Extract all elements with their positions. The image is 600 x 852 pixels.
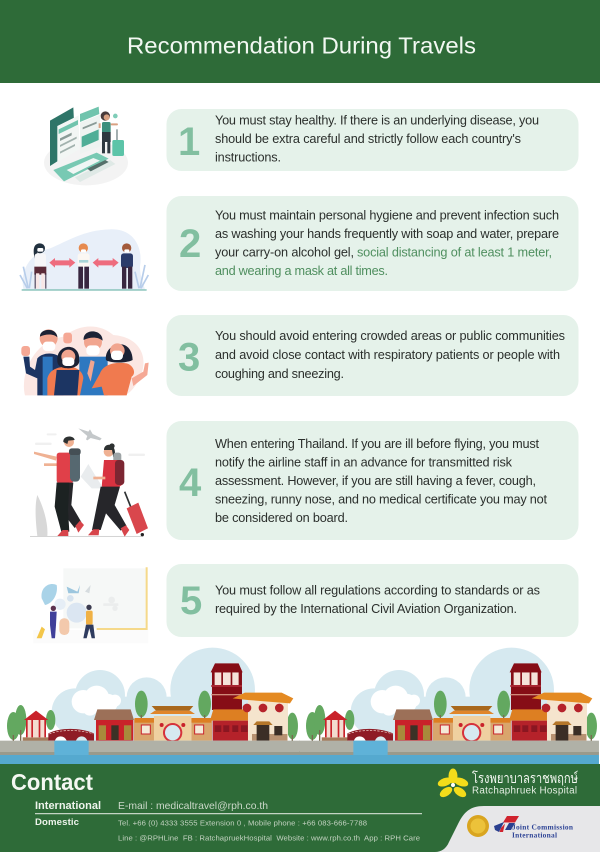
icon: flower	[437, 768, 469, 799]
domestic contact: Tel. +66 (0) 4333 3555 Extension 0 , Mobile phone : +66 083-666-7788	[118, 818, 367, 828]
panel 2 text	[215, 208, 559, 278]
illustration: social distancing seats	[20, 229, 148, 291]
illustration: aviation regulations	[33, 567, 148, 643]
illustration: traveller with phone and tickets	[44, 107, 128, 185]
number 2: 2	[179, 222, 201, 266]
international contact: E-mail : medicaltravel@rph.co.th	[118, 801, 268, 812]
number 1: 1	[178, 120, 200, 164]
number 5: 5	[180, 579, 202, 623]
panel 1 text: instructions.	[215, 150, 281, 164]
person right	[122, 243, 131, 253]
person middle	[79, 243, 88, 253]
accreditation panel	[435, 806, 600, 852]
panel 5	[166, 564, 578, 637]
suitcase	[125, 492, 131, 507]
panel 4 text: When entering Thailand. If you are ill before flying, you must	[215, 437, 539, 451]
panel 2 text: and wearing a mask at all times.	[215, 264, 388, 278]
number 3: 3	[178, 336, 200, 380]
panel 5 text	[215, 584, 540, 616]
tower	[212, 672, 242, 710]
white house	[248, 699, 288, 741]
waterfront	[0, 741, 300, 752]
red house	[94, 709, 134, 720]
panel 4 text: sneezing, runny nose, and no medical certificate you may not	[215, 492, 547, 506]
panel 1 text: You must stay healthy. If there is an underlying disease, you	[215, 114, 539, 128]
contact footer	[0, 764, 600, 852]
woman	[104, 447, 114, 457]
right woman	[92, 363, 134, 395]
number 4: 4	[179, 461, 202, 505]
international contact: International	[35, 800, 101, 812]
panel 1 text	[215, 114, 539, 164]
domestic contact: Line : @RPHLine FB : RatchapruekHospital Website : www.rph.co.th App : RPH Care	[118, 834, 420, 842]
bridge	[48, 729, 94, 741]
panel 1 text: should be extra careful and strictly follow each country's	[215, 132, 521, 146]
joint commission logo	[494, 816, 573, 840]
front woman	[47, 367, 83, 395]
panel 4 text	[215, 437, 547, 525]
panel 4 text: notify the airline staff in an advance for transmitted risk	[215, 456, 513, 470]
panel 4	[166, 421, 578, 540]
panel 2 text: social distancing of at least 1 meter,	[357, 246, 552, 260]
pavilion	[23, 737, 49, 741]
contact heading: Contact	[11, 769, 93, 795]
gate walls	[134, 719, 154, 741]
hospital logo: Ratchaphruek Hospital	[472, 786, 577, 796]
panel 2	[166, 196, 578, 291]
title: Recommendation During Travels	[127, 32, 476, 58]
hospital logo	[437, 768, 578, 799]
back right man	[79, 357, 108, 395]
gate	[154, 716, 191, 741]
panel 1	[166, 109, 578, 171]
town scene right	[299, 648, 599, 764]
town skyline illustration	[0, 648, 599, 764]
panel 3 text	[215, 329, 565, 381]
icon: gold seal	[467, 815, 489, 837]
town scene left	[0, 648, 300, 764]
panel 3	[166, 315, 578, 396]
person left	[34, 243, 40, 258]
panel 2 text: your carry-on alcohol gel,	[215, 246, 354, 260]
joint commission logo: International	[512, 830, 557, 840]
panel 2 text: You must maintain personal hygiene and prevent infection such	[215, 208, 559, 222]
joint commission logo: Joint Commission	[512, 822, 573, 832]
man	[64, 437, 74, 447]
panel 2 text: as washing your hands frequently with soap and water, prepare	[215, 227, 559, 241]
panel 3 text: and avoid close contact with respiratory patients or people with	[215, 348, 560, 362]
title banner	[0, 0, 600, 83]
illustration: two travellers	[30, 428, 148, 537]
illustration: masked group	[21, 326, 149, 395]
orange shop	[210, 709, 251, 721]
trees	[7, 691, 298, 740]
panel 3 text: You should avoid entering crowded areas or public communities	[215, 329, 565, 343]
back left man	[23, 354, 63, 395]
panel 3 text: coughing and sneezing.	[215, 367, 344, 381]
panel 5 text: required by the International Civil Aviation Organization.	[215, 602, 517, 616]
domestic contact	[35, 817, 420, 842]
panel 5 text: You must follow all regulations according to standards or as	[215, 584, 540, 598]
domestic contact: Domestic	[35, 817, 80, 828]
international contact	[35, 800, 268, 812]
panel 4 text: assessment. However, if you are still having a fever, cough,	[215, 474, 536, 488]
panel 4 text: be considered on board.	[215, 511, 348, 525]
